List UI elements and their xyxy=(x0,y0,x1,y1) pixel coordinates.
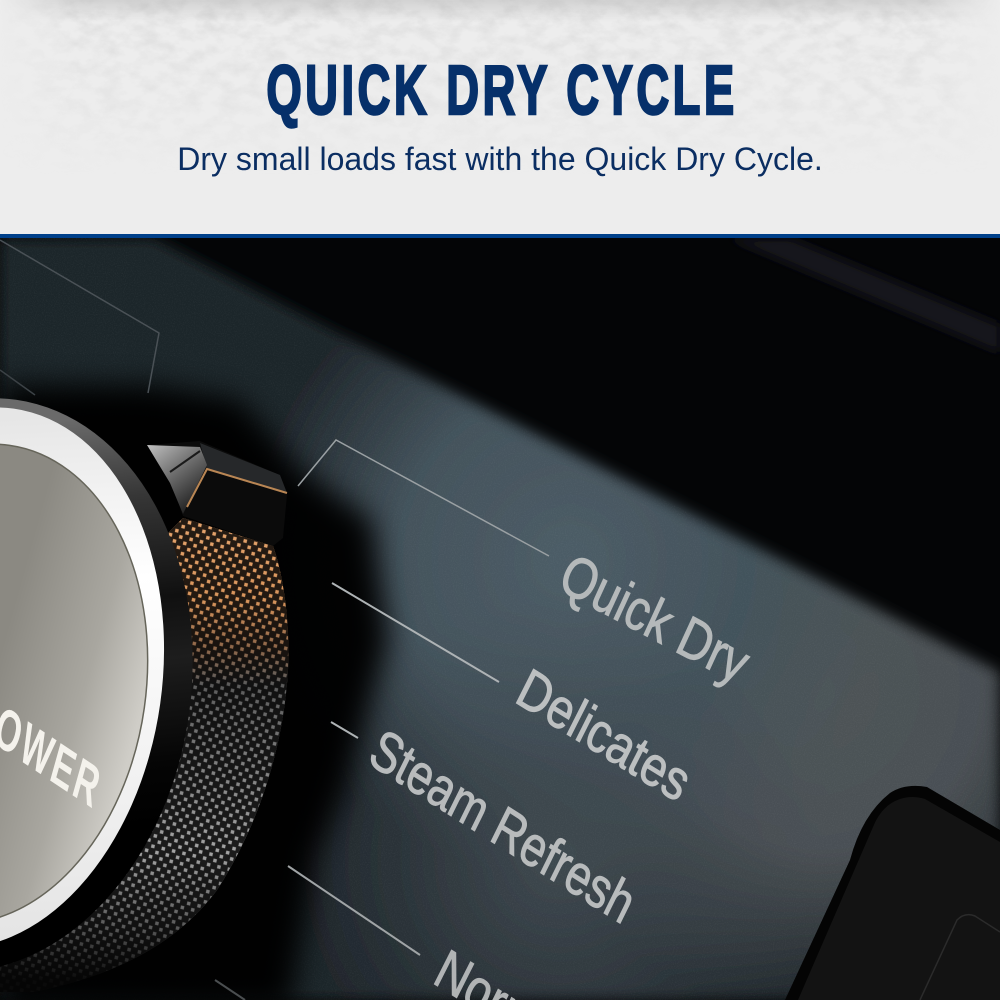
label: Steam Refresh: Steam Refresh xyxy=(361,717,645,936)
knob white ring xyxy=(0,383,198,973)
label: Quick Dry: Quick Dry xyxy=(551,542,759,697)
header band with mottled texture xyxy=(22,0,978,107)
dark background xyxy=(0,238,1000,1000)
panel guide lines xyxy=(0,240,549,1000)
upper right lighter strip xyxy=(727,238,1000,353)
knob knurled ring xyxy=(0,518,288,992)
knob shadow xyxy=(0,385,388,1000)
display window xyxy=(785,786,1000,1000)
title: QUICK DRY CYCLE xyxy=(266,50,738,128)
subtitle: Dry small loads fast with the Quick Dry Cycle. xyxy=(177,141,823,177)
knob pointer xyxy=(147,441,287,546)
control panel surface xyxy=(0,220,1000,1000)
knob cap xyxy=(0,422,178,946)
label: Delicates: Delicates xyxy=(508,656,701,813)
photo: dryer control panel xyxy=(0,238,1000,1000)
header rule xyxy=(0,234,1000,238)
knob xyxy=(0,370,288,1000)
knob black bezel xyxy=(0,370,229,1000)
panel grain xyxy=(0,238,1000,1000)
